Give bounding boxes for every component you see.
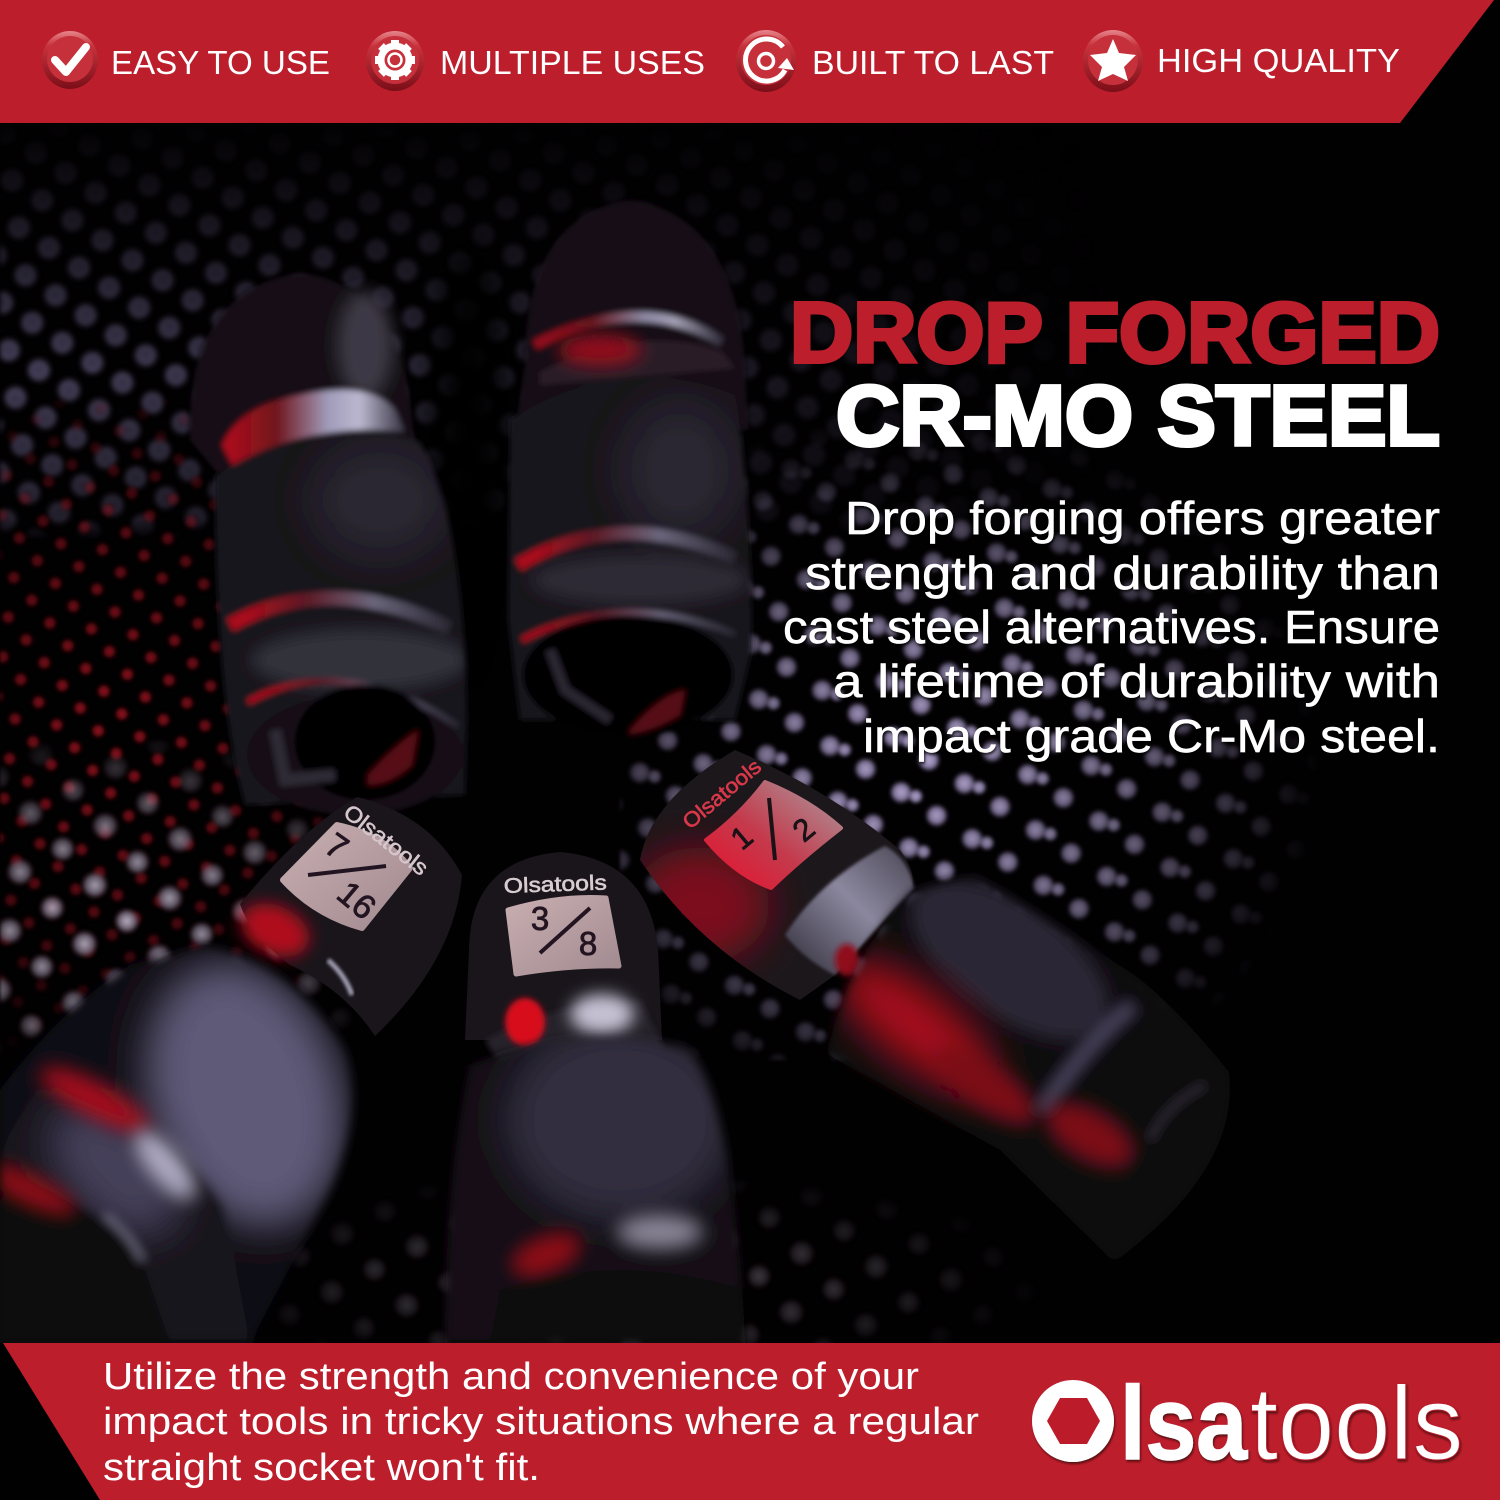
icon: star (1083, 30, 1143, 92)
socket: 9/16 top left, blurred (190, 273, 470, 815)
size plate: 3/8: 3 (531, 900, 549, 937)
socket: 1/2 (630, 750, 1240, 1262)
body text: Drop forging offers greater (845, 492, 1440, 544)
logo: Olsatools: O (1033, 1366, 1113, 1482)
body text: a lifetime of durability with (833, 655, 1440, 707)
brand mark: Olsatools on 3/8 socket: Olsatools (503, 871, 607, 898)
label: easy to use: EASY TO USE (111, 44, 330, 81)
brand mark: Olsatools on 1/2 socket: Olsatools (678, 755, 766, 834)
size plate: 3/8: 8 (579, 925, 597, 962)
logo: Olsatools: lsa (1120, 1366, 1248, 1482)
size plate: 7/16: 16 (330, 874, 383, 927)
label: multiple uses: MULTIPLE USES (440, 44, 705, 81)
body text: cast steel alternatives. Ensure (783, 601, 1440, 653)
body text: strength and durability than (805, 547, 1440, 599)
body text (783, 492, 1440, 762)
logo: Olsatools (1032, 1366, 1463, 1482)
top banner (0, 0, 1494, 123)
size plate: 1/2: 2 (786, 811, 822, 849)
socket: 7/16 (0, 797, 462, 1343)
footer text: Utilize the strength and convenience of your (103, 1356, 919, 1398)
size plate: 7/16: 7 (318, 826, 355, 868)
size plate: 1/2: 1 (724, 819, 760, 857)
footer text (103, 1356, 979, 1489)
logo: Olsatools: tools (1250, 1366, 1463, 1482)
brand mark: Olsatools on 7/16 socket: Olsatools (339, 799, 433, 881)
size plate: 3/8 (508, 898, 619, 974)
socket: 5/8 top centre, blurred (508, 200, 752, 735)
headline: DROP FORGED (790, 286, 1440, 381)
icon: gear (366, 31, 424, 91)
size plate: 7/16 (283, 825, 410, 928)
socket: 3/8 (445, 852, 745, 1343)
bottom banner (3, 1343, 1500, 1500)
icon: circular arrow gear (736, 30, 796, 92)
headline: CR-MO STEEL (836, 369, 1440, 464)
size plate: 1/2 (706, 782, 841, 888)
footer text: impact tools in tricky situations where a regular (103, 1401, 979, 1443)
body text: impact grade Cr-Mo steel. (863, 710, 1440, 762)
icon: check mark (42, 31, 98, 89)
footer text: straight socket won't fit. (103, 1447, 540, 1489)
label: built to last: BUILT TO LAST (812, 44, 1054, 81)
photo background: dotted mat (0, 144, 1306, 1343)
headline (790, 286, 1440, 464)
label: high quality: HIGH QUALITY (1157, 42, 1400, 79)
